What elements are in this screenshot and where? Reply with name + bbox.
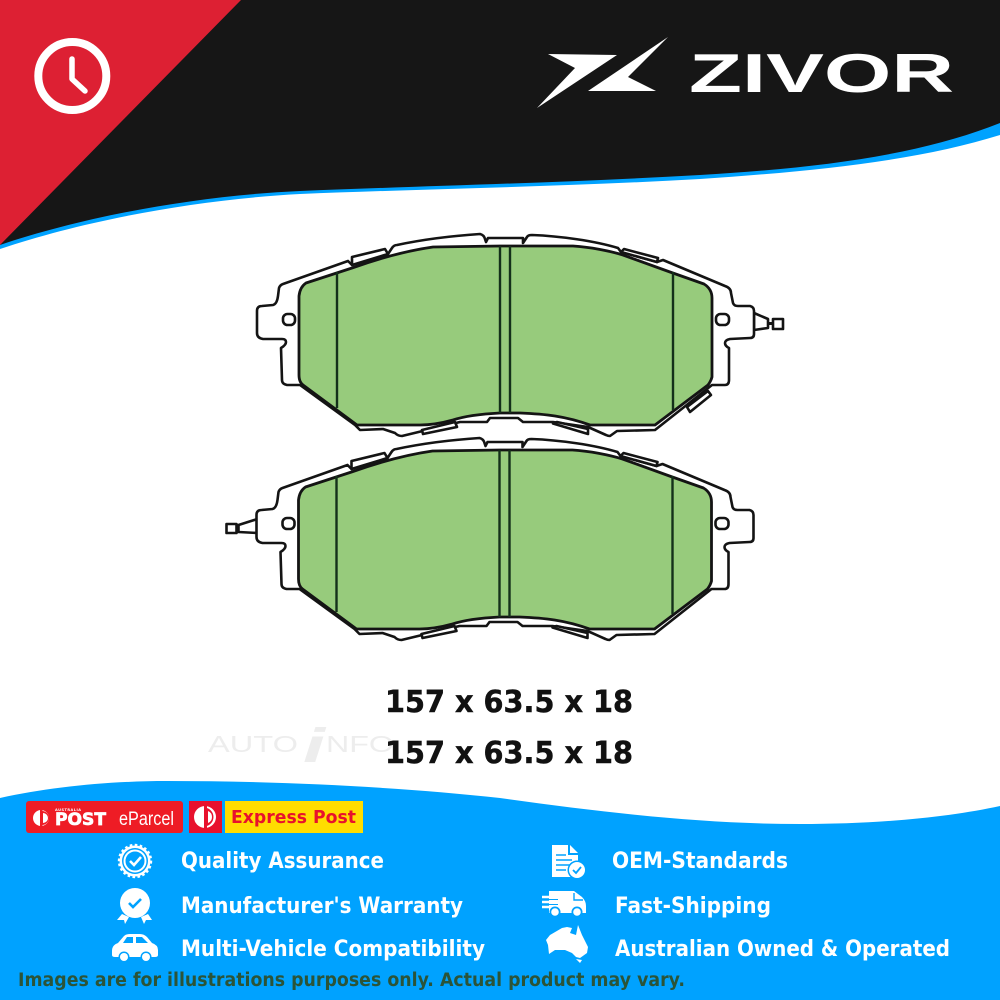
- label: OEM-Standards: OEM-Standards: [612, 849, 788, 874]
- wear indicator: [226, 519, 258, 533]
- wear indicator: [754, 313, 783, 330]
- mounting holes: [283, 314, 729, 325]
- friction material: [298, 450, 712, 629]
- label: Multi-Vehicle Compatibility: Multi-Vehicle Compatibility: [181, 937, 485, 962]
- pad grooves: [336, 450, 672, 617]
- icon: document with check: [552, 845, 586, 880]
- icon: map of Australia: [546, 925, 588, 963]
- icon: car: [112, 934, 158, 962]
- lower clips: [422, 422, 588, 434]
- footer panel: [0, 781, 1000, 1000]
- pad grooves: [337, 246, 673, 413]
- badge: Australia Post eParcel: AUSTRALIA: [55, 808, 81, 812]
- brake pad: top: [257, 234, 783, 436]
- badge: Australia Post eParcel: eParcel: [119, 809, 174, 830]
- brake pad: bottom: [226, 438, 754, 640]
- label: Manufacturer's Warranty: Manufacturer's Warranty: [181, 894, 463, 919]
- logo mark: [537, 37, 668, 108]
- label: Australian Owned & Operated: Australian Owned & Operated: [615, 937, 950, 962]
- mounting holes: [282, 518, 728, 529]
- icon: clock: [38, 42, 106, 110]
- disclaimer: Images are for illustrations purposes only. Actual product may vary.: [18, 970, 685, 991]
- icon: quality seal: [119, 845, 151, 877]
- lower right clip: [687, 391, 711, 412]
- badge: Express Post: Express Post: [231, 807, 356, 828]
- backing plate outline: [257, 234, 754, 436]
- watermark: AUTOiNFO: NFO: [326, 731, 394, 757]
- badge: Australia Post eParcel: POST: [55, 810, 106, 830]
- dimensions: line 1: 157 x 63.5 x 18: [385, 685, 633, 720]
- friction material: [299, 246, 712, 425]
- header banner: [0, 0, 1000, 249]
- label: Quality Assurance: Quality Assurance: [181, 849, 384, 874]
- label: Fast-Shipping: Fast-Shipping: [615, 894, 771, 919]
- dimensions: line 2: 157 x 63.5 x 18: [385, 736, 633, 771]
- red corner triangle: [0, 0, 241, 245]
- icon: delivery van: [542, 891, 586, 918]
- lower clips: [422, 626, 588, 638]
- logo: ZIVOR: [537, 37, 954, 108]
- badge: Australia Post eParcel: [26, 801, 183, 833]
- upper clips: [352, 249, 658, 265]
- watermark: AUTOiNFO: AUTO: [208, 731, 298, 757]
- icon: warranty medal: [117, 888, 152, 924]
- badge: Express Post: [189, 801, 363, 833]
- watermark: AUTOiNFO: [208, 720, 394, 773]
- backing plate outline: [256, 438, 754, 640]
- logo wordmark: ZIVOR: [689, 42, 954, 104]
- watermark: AUTOiNFO: i: [303, 720, 328, 773]
- upper clips: [352, 453, 658, 469]
